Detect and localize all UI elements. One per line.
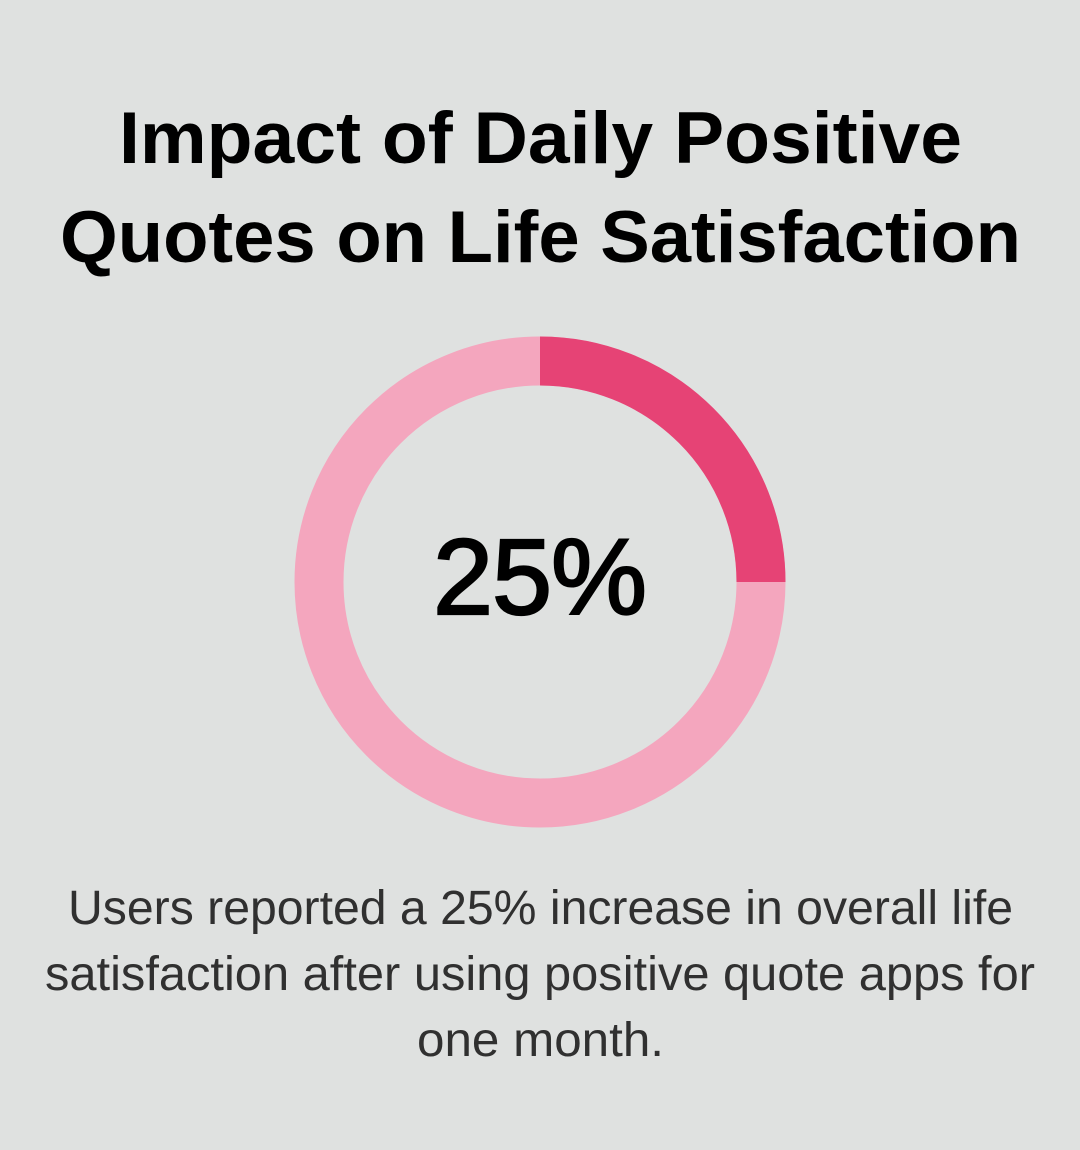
center value: 25% [433, 516, 647, 637]
title: Impact of Daily Positive [119, 98, 962, 179]
donut chart: 25 percent [319, 361, 761, 803]
description text [45, 882, 1035, 1067]
title: Quotes on Life Satisfaction [60, 197, 1021, 278]
description text: Users reported a 25% increase in overall life [68, 882, 1013, 935]
description text: one month. [417, 1014, 664, 1067]
description text: satisfaction after using positive quote apps for [45, 948, 1035, 1001]
donut remainder: 75 percent [319, 361, 761, 803]
title [60, 98, 1021, 278]
donut highlighted segment: 25 percent [540, 361, 761, 582]
